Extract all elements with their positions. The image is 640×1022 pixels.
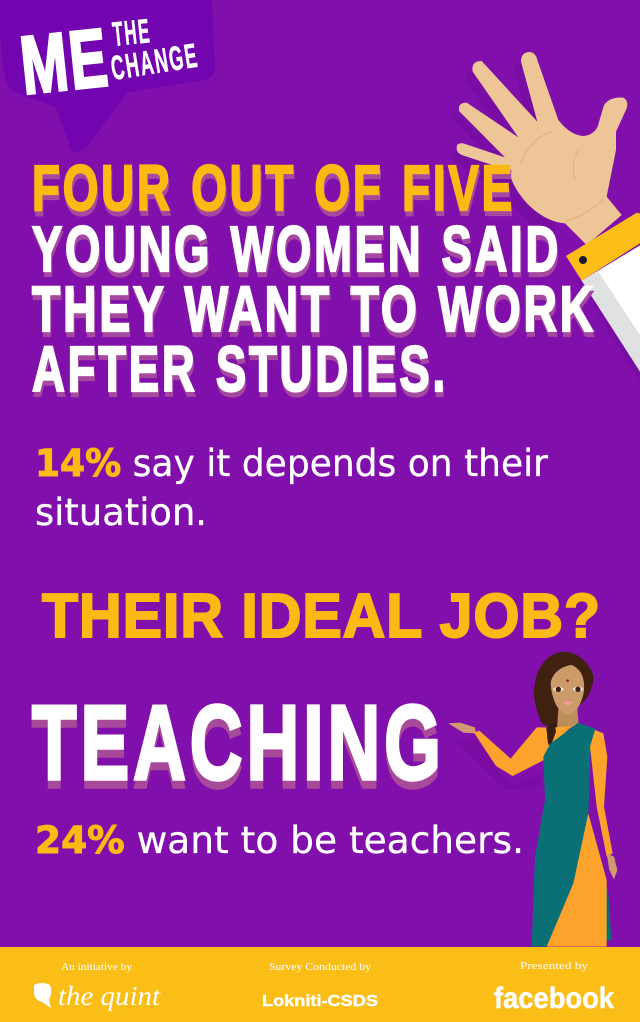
text: 14% say it depends: 14% say it depends on their (35, 442, 549, 485)
credit: survey conducted by lokniti-csds: Lokniti-CSDS (262, 993, 378, 1010)
heading: teaching (32, 684, 445, 810)
credit: an initiative by the quint: the quint (58, 981, 162, 1011)
credit: presented by facebook: Presented by (520, 960, 589, 972)
credit: presented by facebook: facebook (494, 982, 614, 1015)
heading line 4: AFTER STUDIES. (32, 333, 448, 405)
logo: me the change speech bubble: CHANGE (108, 37, 201, 88)
credit: survey conducted by lokniti-csds: Survey Conducted by (269, 961, 372, 973)
heading: their ideal job: THEIR IDEAL JOB? (42, 582, 601, 651)
logo: me the change speech bubble: ME (16, 12, 113, 112)
logo: me the change speech bubble (0, 0, 215, 152)
icon: raised hand with cuff (450, 52, 640, 387)
text: 14% say it depends: situation. (35, 491, 207, 534)
heading: four out of five young women (32, 152, 597, 410)
credit: an initiative by the quint: An initiative by (61, 961, 133, 973)
logo: me the change speech bubble: THE (111, 12, 153, 54)
footer band (0, 947, 640, 1022)
credit: presented by facebook (494, 960, 614, 1015)
credit: survey conducted by lokniti-csds (262, 961, 378, 1010)
credit: an initiative by the quint (34, 961, 162, 1011)
text: 14% say it depends (35, 442, 549, 534)
illustration: woman in sari (448, 652, 617, 947)
heading: teaching: TEACHING (32, 684, 445, 802)
heading line 4 (32, 333, 449, 410)
heading: teaching: TEACHING (32, 692, 445, 810)
heading line 4: AFTER STUDIES. (33, 338, 449, 410)
text: 24% want to be teachers: 24% want to be teachers. (35, 819, 524, 862)
